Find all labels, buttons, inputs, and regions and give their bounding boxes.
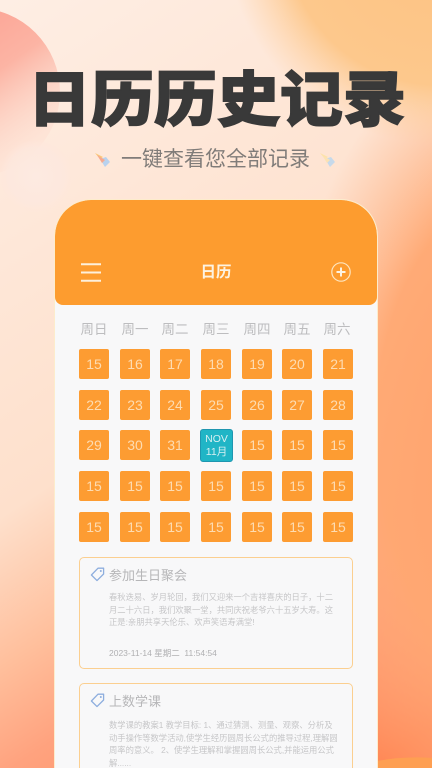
icon: right comet [320, 153, 335, 167]
text: 21 [330, 356, 346, 372]
text: 15 [330, 478, 346, 494]
text: 17 [167, 356, 183, 372]
text: 周二 [162, 322, 188, 337]
text: 18 [208, 356, 224, 372]
text: 15 [86, 356, 102, 372]
text: 15 [289, 519, 305, 535]
text: 周五 [284, 322, 310, 337]
text: 15 [330, 519, 346, 535]
icon: add [331, 262, 351, 282]
text: 24 [167, 397, 183, 413]
text: 31 [167, 437, 183, 453]
text: 15 [249, 437, 265, 453]
text: 11月 [206, 446, 227, 458]
text: 26 [249, 397, 265, 413]
text: 15 [167, 478, 183, 494]
text: 周六 [324, 322, 350, 337]
text: 23 [127, 397, 143, 413]
note body: 数学课的教案1 教学目标: 1、通过猜测、测量、观察、分析及 [109, 720, 333, 730]
text: 周一 [122, 322, 148, 337]
note body: 正是:亲朋共享天伦乐、欢声笑语寿满堂! [109, 617, 255, 627]
text: 15 [208, 478, 224, 494]
text: 15 [86, 519, 102, 535]
note timestamp: 2023-11-14 星期二 11:54:54 [109, 648, 217, 658]
title: 日历历史记录 [28, 67, 406, 134]
note title: 上数学课 [109, 694, 161, 709]
calendar grid [79, 349, 353, 542]
text: 25 [208, 397, 224, 413]
text: 15 [249, 519, 265, 535]
note body [109, 720, 338, 768]
note body: 动手操作等数学活动,使学生经历圆周长公式的推导过程,理解圆 [109, 732, 338, 742]
text: 15 [127, 478, 143, 494]
header bar [55, 200, 377, 305]
text: 周四 [244, 322, 270, 337]
text: 周日 [80, 322, 108, 337]
text: 29 [86, 437, 102, 453]
note body: 月二十六日，我们欢聚一堂，共同庆祝老爷六十五岁大寿。这 [109, 604, 333, 614]
text: 15 [127, 519, 143, 535]
icon: left comet [95, 153, 110, 167]
weekday labels [80, 322, 350, 337]
text: 15 [167, 519, 183, 535]
panel: note birthday party [79, 557, 353, 669]
subtitle: 一键查看您全部记录 [121, 148, 310, 171]
note body: 春秋迭易、岁月轮回，我们又迎来一个吉祥喜庆的日子，十二 [109, 592, 333, 602]
header title: 日历 [200, 264, 232, 281]
text: 15 [330, 437, 346, 453]
text: 15 [208, 519, 224, 535]
text: 16 [127, 356, 143, 372]
text: 15 [289, 478, 305, 494]
note body: 周率的意义。 2、使学生理解和掌握圆周长公式,并能运用公式 [109, 745, 334, 755]
icon: tag [90, 694, 104, 708]
panel: phone screen [55, 200, 377, 768]
note body [109, 592, 333, 627]
icon: tag [90, 568, 104, 582]
panel: note math class [79, 683, 353, 768]
text: 19 [249, 356, 265, 372]
text: NOV [205, 433, 228, 445]
icon: menu [81, 263, 101, 282]
text: 15 [289, 437, 305, 453]
text: 30 [127, 437, 143, 453]
text: 27 [289, 397, 305, 413]
text: 15 [86, 478, 102, 494]
text: 周三 [202, 322, 230, 337]
text: 28 [330, 397, 346, 413]
note title: 参加生日聚会 [109, 568, 187, 583]
text: 22 [86, 397, 102, 413]
note body: 解...... [109, 758, 131, 768]
text: 20 [289, 356, 305, 372]
text: 15 [249, 478, 265, 494]
